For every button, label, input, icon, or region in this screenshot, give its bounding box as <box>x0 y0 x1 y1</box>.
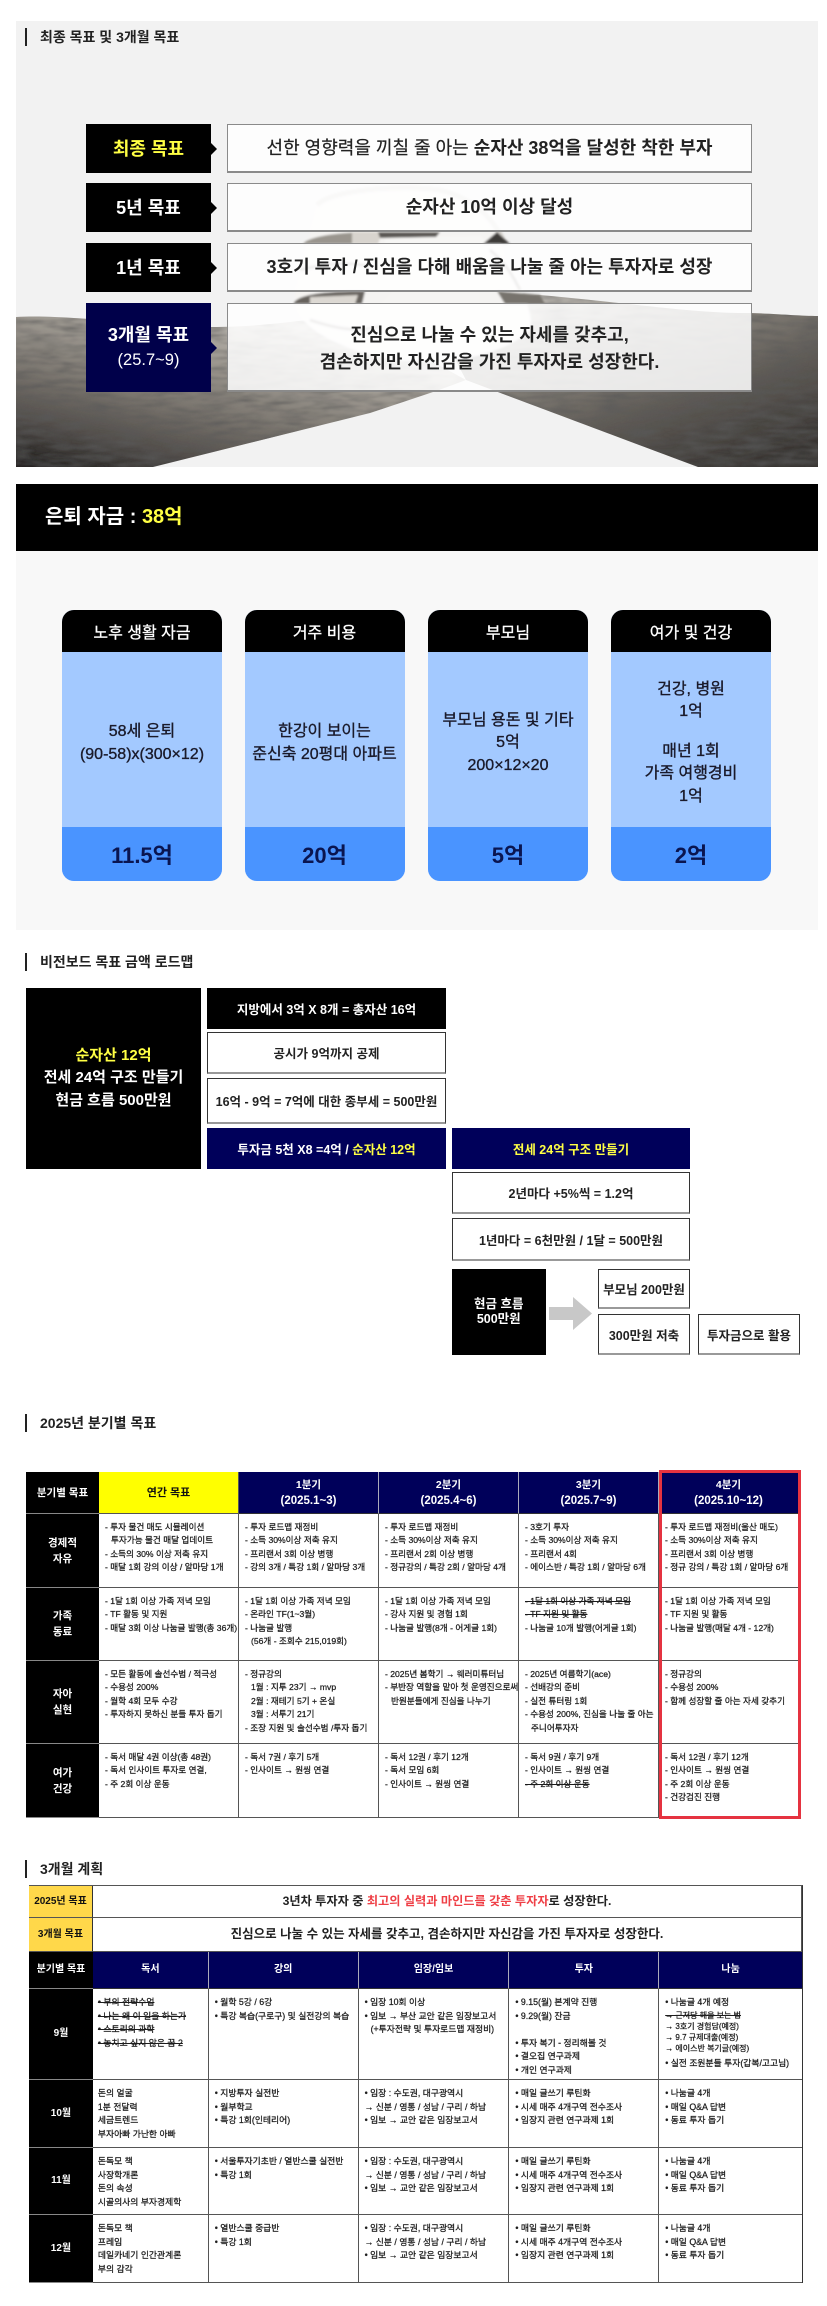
roadmap: annual increase <box>452 1218 690 1261</box>
row: category header: 독서 <box>141 1964 160 1975</box>
table header row <box>26 1472 798 1514</box>
row: September: • 부의 전략수업 <box>98 1997 154 2007</box>
row: economic freedom: - 3호기 투자 <box>525 1522 569 1532</box>
row: November: 돈의 속성 <box>98 2183 133 2193</box>
table header row: (2025.4~6) <box>421 1494 476 1506</box>
row: leisure and health <box>26 1744 749 1818</box>
row: family and colleagues: - 나눔글 발행(매달 4개 - 12개) <box>665 1623 774 1633</box>
row: October: • 임장지 관련 연구과제 1회 <box>515 2115 614 2125</box>
row: 3-month goal <box>29 1918 802 1952</box>
row: December: • 특강 1회 <box>215 2236 252 2246</box>
row: November: • 임장지 관련 연구과제 1회 <box>515 2183 614 2193</box>
row: economic freedom: - 투자 로드맵 재정비 <box>245 1522 318 1532</box>
row: 2025 goal: 3년차 투자자 중 최고의 실력과 마인드를 갖춘 투자자로 성장한다. <box>283 1894 611 1908</box>
row: leisure and health: - 인사이트 → 원씽 연결 <box>525 1765 609 1775</box>
card: parents: 5억 <box>492 843 524 868</box>
row: October: • 동료 투자 돕기 <box>665 2115 724 2125</box>
card: leisure and health: 1억 <box>679 788 703 805</box>
panel: retirement fund breakdown <box>16 551 818 930</box>
row: category header: 분기별 목표 <box>37 1964 85 1975</box>
row: September: • 9.15(월) 본계약 진행 <box>515 1997 597 2007</box>
roadmap: two-year increase: 2년마다 +5%씩 = 1.2억 <box>509 1187 633 1201</box>
row: October: • 임장 : 수도권, 대구광역시 <box>365 2088 463 2098</box>
row: self-realization: - 함께 성장할 줄 아는 자세 갖추기 <box>665 1696 785 1706</box>
row: self-realization: - 수용성 200% <box>665 1682 718 1692</box>
row: October: 세금트렌드 <box>98 2115 138 2125</box>
card: housing: 한강이 보이는 <box>278 723 371 740</box>
roadmap: parents allowance <box>598 1269 690 1309</box>
row: economic freedom: - 강의 3개 / 특강 1회 / 알마당 3개 <box>245 1562 365 1572</box>
row: leisure and health: - 주 2회 이상 운동 <box>525 1779 590 1789</box>
row: category header: 강의 <box>274 1964 292 1975</box>
row: leisure and health: - 인사이트 → 원씽 연결 <box>665 1765 749 1775</box>
roadmap: cash flow: 현금 흐름 <box>474 1297 523 1311</box>
row: leisure and health: - 독서 12권 / 후기 12개 <box>385 1752 469 1762</box>
roadmap: deduction <box>207 1032 446 1074</box>
card: parents: 200×12×20 <box>468 757 548 774</box>
roadmap: cash flow <box>452 1269 546 1355</box>
row: family and colleagues: - 1달 1회 이상 가족 저녁 모임 <box>245 1596 351 1606</box>
row: self-realization: 자아 <box>53 1688 72 1700</box>
card: parents: 부모님 용돈 및 기타 <box>442 712 574 729</box>
row: leisure and health: 건강 <box>53 1782 72 1794</box>
roadmap: total assets: 지방에서 3억 X 8개 = 총자산 16억 <box>237 1003 416 1017</box>
card: retirement living: 11.5억 <box>111 843 173 868</box>
card: leisure and health: 여가 및 건강 <box>650 625 732 642</box>
row: self-realization: - 조장 지원 및 솔선수범 /투자 돕기 <box>245 1723 367 1733</box>
row: economic freedom: - 정규 강의 / 특강 1회 / 알마당 6개 <box>665 1562 788 1572</box>
row: family and colleagues: - 강사 지원 및 경험 1회 <box>385 1609 468 1619</box>
row: economic freedom: - 프리랜서 2회 이상 병행 <box>385 1549 473 1559</box>
row: 2025 goal <box>29 1886 802 1918</box>
row: October: • 임보 → 교안 같은 임장보고서 <box>365 2115 478 2125</box>
roadmap: summary box: 전세 24억 구조 만들기 <box>44 1069 183 1086</box>
row: leisure and health: - 인사이트 → 원씽 연결 <box>385 1779 469 1789</box>
row: September: → 에이스반 복기글(예정) <box>665 2044 749 2052</box>
row: family and colleagues: - 1달 1회 이상 가족 저녁 모임 <box>665 1596 771 1606</box>
row: self-realization: - 실전 튜터링 1회 <box>525 1696 587 1706</box>
table header row: (2025.10~12) <box>694 1494 763 1506</box>
row: economic freedom: - 에이스반 / 특강 1회 / 알마당 6개 <box>525 1562 646 1572</box>
row: November: 시골의사의 부자경제학 <box>98 2196 181 2206</box>
row: economic freedom: - 프리랜서 3회 이상 병행 <box>245 1549 333 1559</box>
roadmap: annual increase: 1년마다 = 6천만원 / 1달 = 500만원 <box>479 1234 663 1248</box>
label: 1-year goal: 1년 목표 <box>116 258 181 278</box>
photo: clasped forearms <box>16 232 818 467</box>
card: housing: 20억 <box>302 843 347 868</box>
card: housing: 준신축 20평대 아파트 <box>252 746 397 762</box>
row: October: • 나눔글 4개 <box>665 2088 710 2098</box>
roadmap: property tax <box>207 1078 446 1124</box>
row: economic freedom: - 소득의 30% 이상 저축 유지 <box>105 1549 208 1559</box>
row: family and colleagues <box>26 1588 798 1661</box>
row: September: • 놓치고 싶지 않은 꿈 2 <box>98 2038 183 2048</box>
row: self-realization: - 정규강의 <box>245 1669 282 1679</box>
row: economic freedom: - 투자 로드맵 재정비 <box>385 1522 458 1532</box>
roadmap: deduction: 공시가 9억까지 공제 <box>274 1047 379 1061</box>
row: October <box>29 2080 802 2148</box>
row: family and colleagues: - 1달 1회 이상 가족 저녁 모임 <box>385 1596 491 1606</box>
row: December: • 임보 → 교안 같은 임장보고서 <box>365 2250 478 2260</box>
table: 2025 quarterly goals <box>26 1472 798 1818</box>
label: final goal: 최종 목표 <box>113 138 184 158</box>
row: September: • 9.29(월) 잔금 <box>515 2010 571 2020</box>
row: November: • 나눔글 4개 <box>665 2156 710 2166</box>
row: economic freedom <box>26 1514 798 1588</box>
table header row: 3분기 <box>576 1478 601 1490</box>
row: self-realization: - 모든 활동에 솔선수범 / 적극성 <box>105 1669 217 1679</box>
table header row: 2분기 <box>436 1478 461 1490</box>
text: 3-month goal: 겸손하지만 자신감을 가진 투자자로 성장한다. <box>320 352 659 372</box>
roadmap: summary box <box>26 988 201 1169</box>
row: category header <box>29 1952 802 1989</box>
roadmap: property tax: 16억 - 9억 = 7억에 대한 종부세 = 500만원 <box>216 1095 437 1109</box>
heading: final goal and 3-month goal: 최종 목표 및 3개월 목표 <box>40 29 179 45</box>
row: economic freedom: - 소득 30%이상 저축 유지 <box>245 1535 338 1545</box>
row: economic freedom: 자유 <box>53 1552 72 1564</box>
row: family and colleagues: - 매달 3회 이상 나눔글 발행(총 36개) <box>105 1623 237 1633</box>
row: November: • 서울투자기초반 / 열반스쿨 실전반 <box>215 2156 343 2166</box>
row: September: • 나는 왜 이 일을 하는가 <box>98 2010 186 2020</box>
roadmap: jeonse structure <box>452 1128 690 1169</box>
row: economic freedom: - 소득 30%이상 저축 유지 <box>385 1535 478 1545</box>
row: category header: 임장/임보 <box>414 1964 453 1975</box>
row: November <box>29 2148 802 2215</box>
row: October: • 시세 매주 4개구역 전수조사 <box>515 2102 622 2112</box>
label: final goal <box>86 124 211 173</box>
roadmap: total assets <box>207 988 446 1029</box>
table header row: (2025.7~9) <box>561 1494 616 1506</box>
row: September: • 개인 연구과제 <box>515 2064 572 2074</box>
row: self-realization: - 선배강의 준비 <box>525 1682 580 1692</box>
label: 3-month goal <box>86 303 211 392</box>
row: leisure and health: - 건강검진 진행 <box>665 1792 720 1802</box>
row: November: • 매일 Q&A 답변 <box>665 2170 726 2180</box>
row: family and colleagues: - 온라인 TF(1~3월) <box>245 1609 315 1619</box>
row: November: → 신분 / 영통 / 성남 / 구리 / 하남 <box>365 2170 486 2180</box>
row: self-realization: 1월 : 지투 23기 → mvp <box>251 1682 336 1692</box>
roadmap: jeonse structure: 전세 24억 구조 만들기 <box>513 1143 629 1157</box>
row: December: • 나눔글 4개 <box>665 2223 710 2233</box>
row: economic freedom: - 소득 30%이상 저축 유지 <box>665 1535 758 1545</box>
row: December: 데일카네기 인간관계론 <box>98 2250 181 2260</box>
row: self-realization: - 수용성 200%, 진심을 나눌 줄 아는 <box>525 1709 654 1719</box>
label: 3-month goal: (25.7~9) <box>118 351 179 369</box>
row: September <box>29 1989 802 2080</box>
row: family and colleagues: - 나눔글 발행(8개 - 어게글 1회) <box>385 1623 497 1633</box>
row: November: 사장학개론 <box>98 2170 138 2180</box>
row: leisure and health: 여가 <box>53 1766 72 1778</box>
card: leisure and health <box>611 610 771 881</box>
row: self-realization: 실현 <box>53 1704 72 1716</box>
row: September: • 스토리의 과학 <box>98 2024 154 2034</box>
row: self-realization: - 수용성 200% <box>105 1682 158 1692</box>
row: self-realization: - 2025년 봄학기 → 웨러미튜터님 <box>385 1669 504 1679</box>
row: September: • 투자 복기 - 정리해볼 것 <box>515 2038 606 2048</box>
roadmap: investment net assets <box>207 1128 446 1169</box>
roadmap: investment net assets: 투자금 5천 X8 =4억 / 순자산 12억 <box>237 1143 416 1157</box>
row: September: → 9.7 규제대출(예정) <box>665 2032 738 2042</box>
row: December: → 신분 / 영통 / 성남 / 구리 / 하남 <box>365 2236 486 2246</box>
row: self-realization: - 부반장 역할을 맡아 첫 운영진으로써 <box>385 1682 518 1692</box>
row: December: • 동료 투자 돕기 <box>665 2250 724 2260</box>
heading: vision board roadmap: 비전보드 목표 금액 로드맵 <box>40 954 193 970</box>
row: September: → 3호기 경험담(예정) <box>665 2022 739 2030</box>
card: retirement living: 노후 생활 자금 <box>93 625 191 642</box>
row: September: → 근저당 해율 보는 법 <box>665 2010 741 2020</box>
row: family and colleagues: 동료 <box>53 1626 72 1638</box>
row: family and colleagues: - TF 활동 및 지원 <box>105 1609 167 1619</box>
row: December: 부의 감각 <box>98 2264 133 2274</box>
row: December: • 매일 글쓰기 루틴화 <box>515 2223 591 2233</box>
row: December: • 임장 : 수도권, 대구광역시 <box>365 2223 463 2233</box>
row: self-realization: - 투자하지 못하신 분들 투자 돕기 <box>105 1709 223 1719</box>
label: 1-year goal <box>86 243 211 292</box>
card: parents <box>428 610 588 881</box>
row: leisure and health: - 독서 모임 6회 <box>385 1765 439 1775</box>
card: leisure and health: 건강, 병원 <box>657 681 725 698</box>
row: October: • 특강 1회(인테리어) <box>215 2115 290 2125</box>
table: 3-month plan <box>29 1885 803 2283</box>
roadmap: use as investment: 투자금으로 활용 <box>707 1328 791 1342</box>
row: family and colleagues: - 나눔글 발행 <box>245 1623 292 1633</box>
row: self-realization: - 월학 4회 모두 수강 <box>105 1696 178 1706</box>
row: September: • 임보 → 부산 교안 같은 임장보고서 <box>365 2010 496 2020</box>
card: retirement living: (90-58)x(300×12) <box>80 746 204 762</box>
table header row: 4분기 <box>716 1478 741 1490</box>
text: 1-year goal: 3호기 투자 / 진심을 다해 배움을 나눌 줄 아는 투자자로 성장 <box>267 256 712 276</box>
row: category header: 나눔 <box>721 1964 740 1975</box>
row: economic freedom: - 소득 30%이상 저축 유지 <box>525 1535 618 1545</box>
row: self-realization: 3월 : 서투기 21기 <box>251 1709 314 1719</box>
row: economic freedom: - 정규강의 / 특강 2회 / 알마당 4개 <box>385 1562 506 1572</box>
row: leisure and health: - 독서 9권 / 후기 9개 <box>525 1752 599 1762</box>
row: self-realization <box>26 1661 798 1744</box>
row: economic freedom: - 프리랜서 3회 이상 병행 <box>665 1549 753 1559</box>
row: self-realization: 주니어투자자 <box>531 1723 578 1733</box>
panel: final goal and 3-month goal <box>16 21 818 467</box>
row: December: • 임장지 관련 연구과제 1회 <box>515 2250 614 2260</box>
card: housing <box>244 610 404 881</box>
row: economic freedom: - 투자 물건 매도 시뮬레이션 <box>105 1522 204 1532</box>
label: 3-month goal: 3개월 목표 <box>108 325 189 345</box>
row: self-realization: 반원분들에게 진심을 나누기 <box>391 1696 491 1706</box>
row: economic freedom: - 프리랜서 4회 <box>525 1549 577 1559</box>
card: leisure and health: 2억 <box>675 843 707 868</box>
row: December: • 열반스쿨 중급반 <box>215 2223 279 2233</box>
row: November: • 임장 : 수도권, 대구광역시 <box>365 2156 463 2166</box>
roadmap: parents allowance: 부모님 200만원 <box>603 1283 685 1297</box>
row: leisure and health: - 인사이트 → 원씽 연결 <box>245 1765 329 1775</box>
roadmap: savings: 300만원 저축 <box>609 1328 679 1342</box>
row: October: • 지방투자 실전반 <box>215 2088 279 2098</box>
card: retirement living: 58세 은퇴 <box>109 723 175 740</box>
row: October: 돈의 얼굴 <box>98 2088 133 2098</box>
row: 3-month goal: 3개월 목표 <box>38 1929 83 1940</box>
arrow: cash flow split <box>549 1297 592 1330</box>
text: 5-year goal <box>227 183 752 232</box>
row: November: 11월 <box>51 2175 71 2186</box>
row: October: 부자아빠 가난한 아빠 <box>98 2128 176 2138</box>
row: leisure and health: - 주 2회 이상 운동 <box>665 1779 730 1789</box>
row: family and colleagues: (56개 - 조회수 215,019회) <box>251 1636 347 1646</box>
row: September: • 실전 조원분들 투자(갑복/고고님) <box>665 2058 789 2068</box>
row: 3-month goal: 진심으로 나눌 수 있는 자세를 갖추고, 겸손하지만 자신감을 가진 투자자로 성장한다. <box>231 1927 663 1941</box>
highlight: fourth quarter frame <box>659 1470 801 1819</box>
text: final goal <box>227 124 752 173</box>
row: November: • 임보 → 교안 같은 임장보고서 <box>365 2183 478 2193</box>
row: family and colleagues: - 나눔글 10개 발행(어게글 1회) <box>525 1623 637 1633</box>
row: September: 9월 <box>54 2028 68 2039</box>
row: September: • 특강 복습(구로구) 및 실전강의 복습 <box>215 2010 349 2020</box>
row: leisure and health: - 독서 매달 4권 이상(총 48권) <box>105 1752 211 1762</box>
row: leisure and health: - 독서 12권 / 후기 12개 <box>665 1752 749 1762</box>
table header row: 1분기 <box>296 1478 321 1490</box>
text: 5-year goal: 순자산 10억 이상 달성 <box>406 196 573 216</box>
row: family and colleagues: - TF 지원 및 활동 <box>665 1609 727 1619</box>
row: September: • 결오집 연구과제 <box>515 2051 580 2061</box>
row: family and colleagues: - 1달 1회 이상 가족 저녁 모임 <box>525 1596 631 1606</box>
row: November: • 특강 1회 <box>215 2170 252 2180</box>
row: October: • 매일 글쓰기 루틴화 <box>515 2088 591 2098</box>
card: retirement living <box>62 610 222 881</box>
row: 2025 goal: 2025년 목표 <box>34 1896 87 1907</box>
row: September: • 월학 5강 / 6강 <box>215 1997 272 2007</box>
row: December: • 매일 Q&A 답변 <box>665 2236 726 2246</box>
roadmap: summary box: 순자산 12억 <box>75 1047 152 1064</box>
row: November: • 매일 글쓰기 루틴화 <box>515 2156 591 2166</box>
row: self-realization: - 2025년 여름학기(ace) <box>525 1669 611 1679</box>
text: 3-month goal <box>227 303 752 392</box>
row: December <box>29 2215 802 2283</box>
row: November: • 동료 투자 돕기 <box>665 2183 724 2193</box>
table header row: (2025.1~3) <box>281 1494 336 1506</box>
row: November: 돈독모 책 <box>98 2156 133 2166</box>
label: 5-year goal <box>86 183 211 232</box>
row: September: (+투자전략 및 투자로드맵 재정비) <box>371 2024 494 2034</box>
row: family and colleagues: - 1달 1회 이상 가족 저녁 모임 <box>105 1596 211 1606</box>
text: 1-year goal <box>227 243 752 292</box>
heading: 3-month plan: 3개월 계획 <box>40 1861 103 1877</box>
row: October: → 신분 / 영통 / 성남 / 구리 / 하남 <box>365 2102 486 2112</box>
row: December: 프레임 <box>98 2236 122 2246</box>
roadmap: two-year increase <box>452 1172 690 1214</box>
row: economic freedom: 투자가능 물건 매달 업데이트 <box>111 1535 213 1545</box>
row: October: 1분 전달력 <box>98 2102 138 2112</box>
text: final goal: 선한 영향력을 끼칠 줄 아는 순자산 38억을 달성한 착한 부자 <box>267 138 712 158</box>
row: family and colleagues: 가족 <box>53 1610 72 1622</box>
row: October: • 월부학교 <box>215 2102 253 2112</box>
row: self-realization: 2월 : 재테기 5기 + 온실 <box>251 1696 335 1706</box>
roadmap: use as investment <box>698 1314 800 1355</box>
banner: retirement fund total: 은퇴 자금 : 38억 <box>45 506 183 528</box>
banner: retirement fund total <box>16 484 818 551</box>
label: 5-year goal: 5년 목표 <box>116 198 181 218</box>
card: leisure and health: 1억 매년 1회 <box>662 703 720 760</box>
row: self-realization: - 정규강의 <box>665 1669 702 1679</box>
row: leisure and health: - 독서 7권 / 후기 5개 <box>245 1752 319 1762</box>
table header row: 분기별 목표 <box>37 1486 88 1498</box>
row: category header: 투자 <box>575 1964 593 1975</box>
row: September: • 나눔글 4개 예정 <box>665 1997 729 2007</box>
heading: 2025 quarterly goals: 2025년 분기별 목표 <box>40 1415 156 1431</box>
row: economic freedom: - 매달 1회 강의 이상 / 알마당 1개 <box>105 1562 224 1572</box>
roadmap: savings <box>598 1314 690 1355</box>
row: October: • 매일 Q&A 답변 <box>665 2102 726 2112</box>
row: leisure and health: - 독서 인사이트 투자로 연결, <box>105 1765 207 1775</box>
row: December: 12월 <box>51 2243 71 2254</box>
row: family and colleagues: - TF 지원 및 활동 <box>525 1609 587 1619</box>
row: September: • 임장 10회 이상 <box>365 1997 425 2007</box>
row: October: 10월 <box>51 2108 71 2119</box>
text: 3-month goal: 진심으로 나눌 수 있는 자세를 갖추고, <box>350 325 629 345</box>
roadmap: summary box: 현금 흐름 500만원 <box>55 1092 172 1109</box>
row: December: 돈독모 책 <box>98 2223 133 2233</box>
card: parents: 부모님 <box>486 625 530 642</box>
table header row: 연간 목표 <box>147 1486 190 1498</box>
card: leisure and health: 가족 여행경비 <box>645 765 737 782</box>
row: November: • 시세 매주 4개구역 전수조사 <box>515 2170 622 2180</box>
roadmap: cash flow: 500만원 <box>477 1312 521 1326</box>
card: parents: 5억 <box>496 734 520 751</box>
card: housing: 거주 비용 <box>293 625 356 642</box>
row: December: • 시세 매주 4개구역 전수조사 <box>515 2236 622 2246</box>
row: economic freedom: - 투자 로드맵 재정비(울산 매도) <box>665 1522 778 1532</box>
row: economic freedom: 경제적 <box>48 1536 77 1548</box>
row: leisure and health: - 주 2회 이상 운동 <box>105 1779 170 1789</box>
